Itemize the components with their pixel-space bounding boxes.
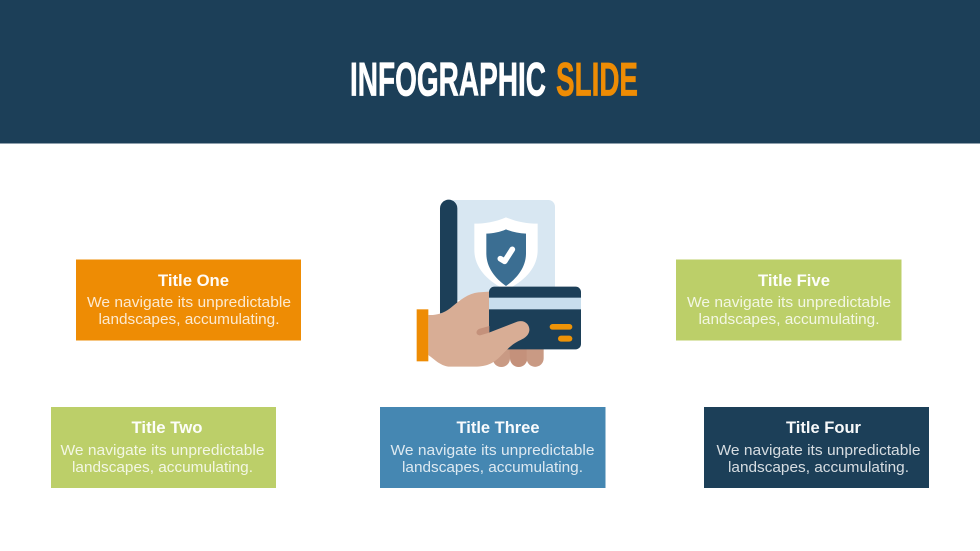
panel: title two: We navigate its unpredictable [60, 442, 264, 459]
panel: title four: Title Four [786, 419, 862, 437]
icon: credit card [489, 287, 581, 349]
title: SLIDE [556, 52, 638, 106]
icon: hand [428, 292, 529, 367]
panel: title five [676, 260, 902, 340]
panel: title three [380, 407, 606, 488]
panel: title three: We navigate its unpredictable [390, 442, 594, 459]
icon: fingers [492, 347, 544, 367]
panel: title two: Title Two [132, 419, 202, 437]
header band [0, 0, 980, 144]
icon: cuff [417, 309, 428, 361]
icon: hand holding card in front of shield book [417, 200, 581, 367]
panel: title three: landscapes, accumulating. [402, 459, 583, 476]
icon: book [440, 200, 555, 313]
panel: title four: landscapes, accumulating. [728, 459, 909, 476]
panel: title two [51, 407, 276, 488]
panel: title five: We navigate its unpredictable [687, 294, 891, 311]
panel: title five: landscapes, accumulating. [698, 311, 880, 328]
title: INFOGRAPHIC [350, 52, 546, 106]
panel: title four [704, 407, 929, 488]
panel: title five: Title Five [758, 272, 830, 290]
panel: title one [76, 260, 301, 340]
panel: title four: We navigate its unpredictable [716, 442, 920, 459]
panel: title one: Title One [158, 272, 229, 290]
panel: title one: We navigate its unpredictable [87, 294, 291, 311]
panel: title three: Title Three [456, 419, 540, 437]
icon: shield with check [474, 217, 538, 290]
panel: title two: landscapes, accumulating. [72, 459, 253, 476]
panel: title one: landscapes, accumulating. [98, 311, 280, 328]
